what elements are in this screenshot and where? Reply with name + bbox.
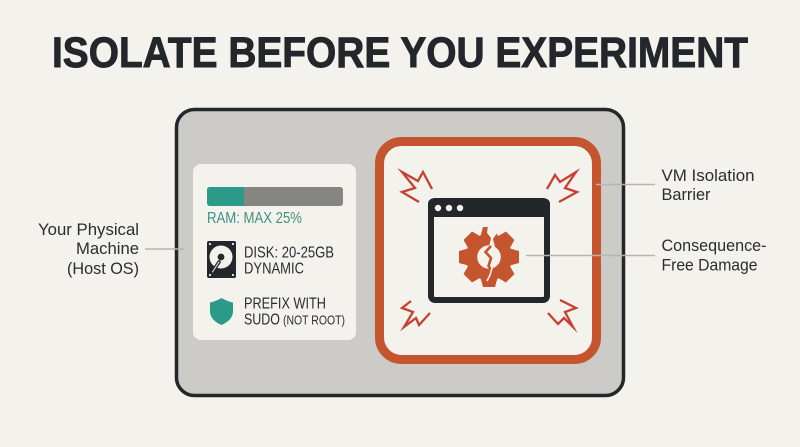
disk label [244,244,334,278]
icon: shield [210,298,233,325]
label: consequence-free damage: Consequence- [662,236,766,255]
panel: physical machine [176,110,624,396]
label: VM isolation barrier [662,166,754,204]
icon: damage sparks [402,172,577,327]
label: consequence-free damage [662,236,766,274]
label: physical machine: Your Physical [38,220,139,239]
panel: resource settings card [193,164,356,340]
icon: hard disk [207,241,236,278]
sudo label [244,296,345,328]
sudo label: PREFIX WITH [244,296,326,312]
disk label: DISK: 20-25GB [244,244,334,262]
leader line: consequence-free damage [526,254,655,256]
RAM label: RAM: MAX 25% [207,210,302,227]
label: VM isolation barrier: VM Isolation [662,166,754,185]
label: physical machine [38,220,139,278]
label: physical machine: Machine [76,239,139,258]
icon: application window [428,198,550,300]
sudo label: SUDO [244,312,280,328]
RAM bar [207,187,343,206]
leader line: VM isolation barrier [596,184,655,186]
disk label: DYNAMIC [244,260,304,278]
icon: broken gear [459,225,519,287]
title: ISOLATE BEFORE YOU EXPERIMENT [52,29,748,77]
panel: isolation barrier frame [380,142,596,360]
label: consequence-free damage: Free Damage [662,256,758,274]
label: VM isolation barrier: Barrier [662,185,711,204]
label: physical machine: (Host OS) [67,259,139,278]
leader line: physical machine [145,248,184,250]
sudo label: (NOT ROOT) [283,314,345,328]
